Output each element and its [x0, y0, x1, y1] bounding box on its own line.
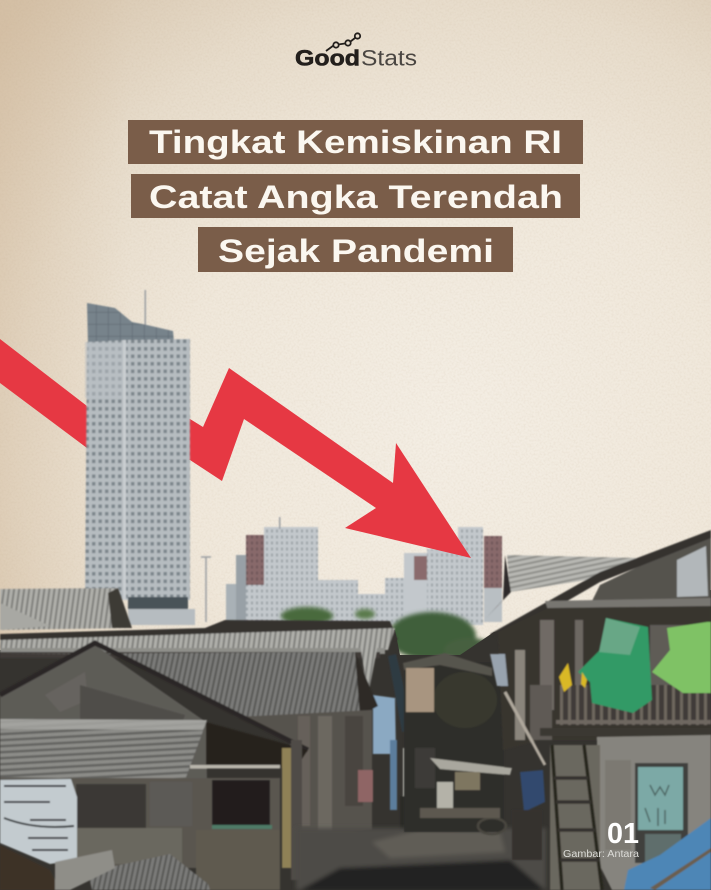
lower wall [70, 778, 280, 868]
mid dark ridge [0, 620, 398, 648]
teal door [635, 763, 688, 863]
title line 2: Catat Angka Terendah [149, 179, 563, 215]
red trend arrow [0, 339, 471, 558]
logo wordmark: Good [295, 46, 360, 70]
back left roof [0, 588, 132, 630]
title line 1: Tingkat Kemiskinan RI [149, 124, 562, 160]
page number: 01 [607, 818, 639, 850]
lamp post [201, 557, 211, 622]
front lower corrugated roof [0, 719, 207, 780]
long corrugated roof band [0, 628, 395, 652]
wooden ladder [550, 745, 602, 890]
right small roof and shed [360, 644, 378, 696]
rubble pile [0, 845, 60, 890]
title line 3 [198, 227, 513, 272]
logo: GoodStats [295, 33, 417, 70]
yellow cloth [559, 663, 572, 692]
alley ground and water [296, 828, 546, 890]
blue clothes [520, 770, 545, 812]
slum house right [486, 530, 711, 890]
icon: trend line above logo [326, 33, 360, 51]
title line 2 [131, 174, 580, 218]
dark backing behind houses [0, 590, 711, 890]
foreground corrugated sheet [88, 854, 210, 890]
back roof right [507, 555, 640, 592]
logo wordmark: Stats [361, 46, 417, 70]
leaning pole [505, 692, 545, 765]
lower concrete wall [597, 735, 711, 890]
green cloth right [652, 622, 711, 693]
title [128, 120, 583, 272]
alley stalls centre [403, 653, 512, 834]
trees [281, 607, 496, 662]
image credit: Gambar: Antara [563, 849, 639, 860]
balcony awning [545, 598, 711, 610]
green cloth left [578, 618, 652, 713]
tower base [128, 597, 188, 611]
tower glass crown [87, 303, 174, 345]
distant apartment blocks [201, 517, 502, 625]
big main roof [0, 652, 365, 717]
title line 1 [128, 120, 583, 164]
tower body [85, 339, 190, 600]
front house roof edge [0, 643, 308, 750]
white graffiti sign [0, 779, 77, 864]
tower antenna [144, 290, 146, 326]
front house gable wall [0, 645, 207, 780]
white rag hanging [490, 654, 508, 686]
slum houses left [0, 588, 415, 890]
blue tarp [624, 818, 711, 890]
upper gable wall [590, 533, 711, 605]
upper storey dark wall [498, 606, 711, 750]
main roof slope [490, 530, 711, 640]
logo wordmark [295, 46, 417, 70]
main tower [85, 290, 195, 625]
balcony railing [560, 685, 711, 725]
title line 3: Sejak Pandemi [218, 233, 494, 269]
rear walls [237, 710, 372, 840]
